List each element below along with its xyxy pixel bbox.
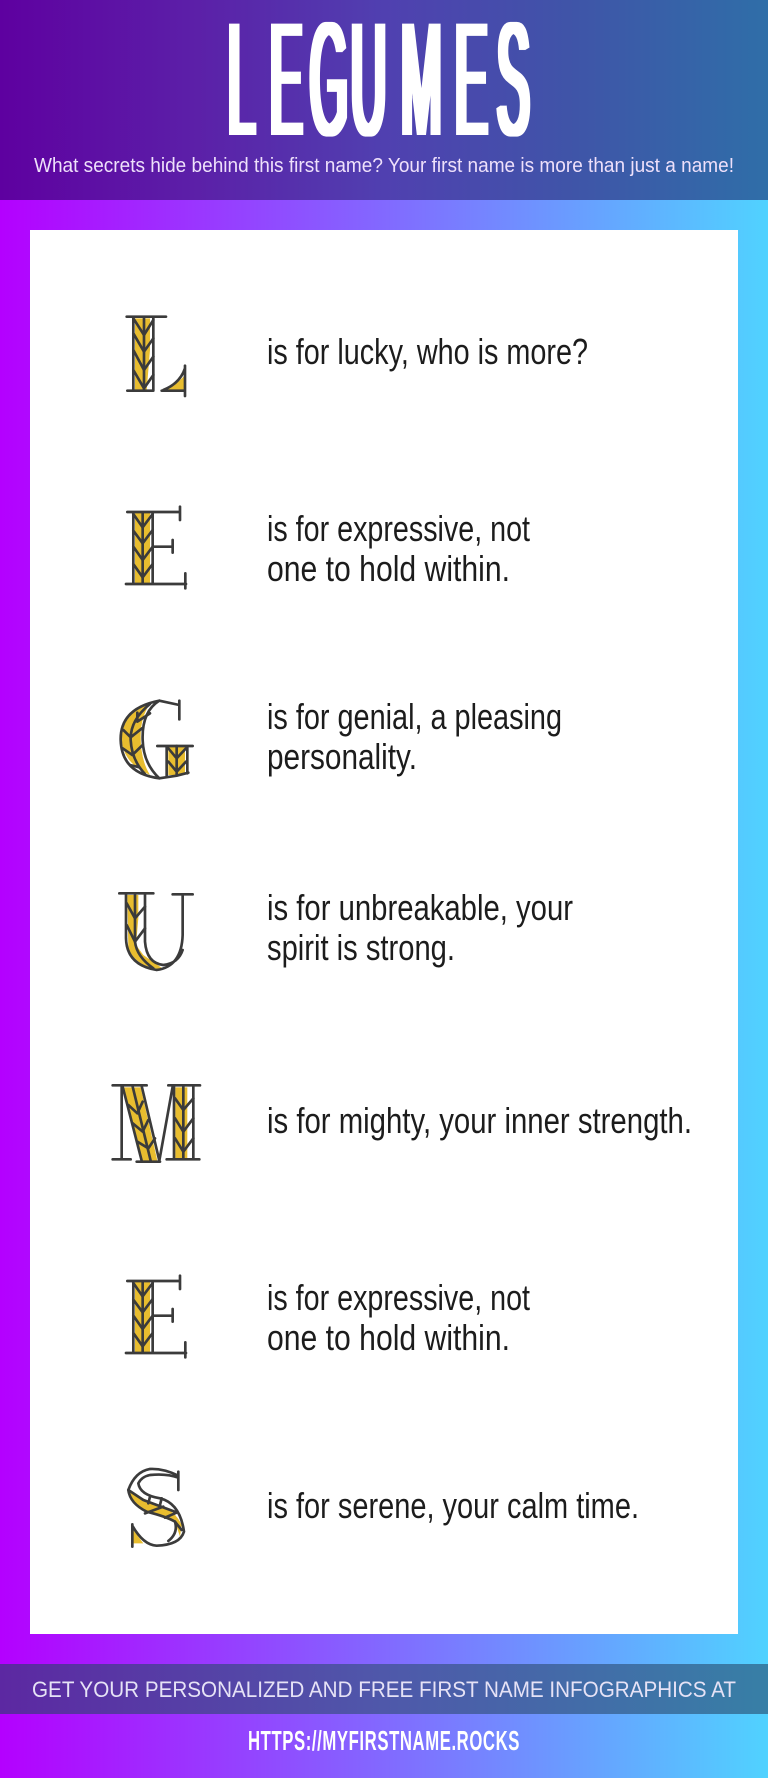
row 6: letter E: one to hold within.: [267, 1317, 510, 1358]
footer url: HTTPS://MYFIRSTNAME.ROCKS: [248, 1725, 520, 1756]
icon: wheat letter E: [126, 507, 186, 588]
row 3: letter G: personality.: [267, 736, 417, 777]
text: S meaning: is for serene, your calm time.: [267, 1485, 639, 1526]
row 4: letter U: [119, 887, 573, 970]
icon: wheat letter U: [119, 893, 193, 970]
icon: wheat letter L: [127, 317, 185, 396]
row 3: letter G: [121, 696, 562, 778]
text: E meaning: is for expressive, not: [267, 508, 530, 549]
white content panel: [30, 230, 738, 1634]
row 7: letter S: [128, 1469, 639, 1547]
icon: wheat letter M: [113, 1085, 200, 1162]
row 1: letter L: [127, 317, 588, 396]
row 4: letter U: spirit is strong.: [267, 927, 455, 968]
icon: wheat letter G: [121, 701, 193, 778]
row 5: letter M: [113, 1085, 692, 1162]
row 6: letter E: [126, 1276, 530, 1358]
text: G meaning: is for genial, a pleasing: [267, 696, 562, 737]
header band: [0, 0, 768, 200]
row 2: letter E: [126, 507, 530, 589]
text: E meaning: is for expressive, not: [267, 1277, 530, 1318]
text: L meaning: is for lucky, who is more?: [267, 331, 588, 372]
row 2: letter E: one to hold within.: [267, 548, 510, 589]
footer band: [0, 1664, 768, 1714]
text: U meaning: is for unbreakable, your: [267, 887, 573, 928]
icon: wheat letter E: [126, 1276, 186, 1357]
footer call to action: GET YOUR PERSONALIZED AND FREE FIRST NAME INFOGRAPHICS AT: [32, 1677, 736, 1702]
subtitle: What secrets hide behind this first name? Your first name is more than just a name!: [34, 155, 734, 177]
icon: wheat letter S: [128, 1469, 184, 1547]
